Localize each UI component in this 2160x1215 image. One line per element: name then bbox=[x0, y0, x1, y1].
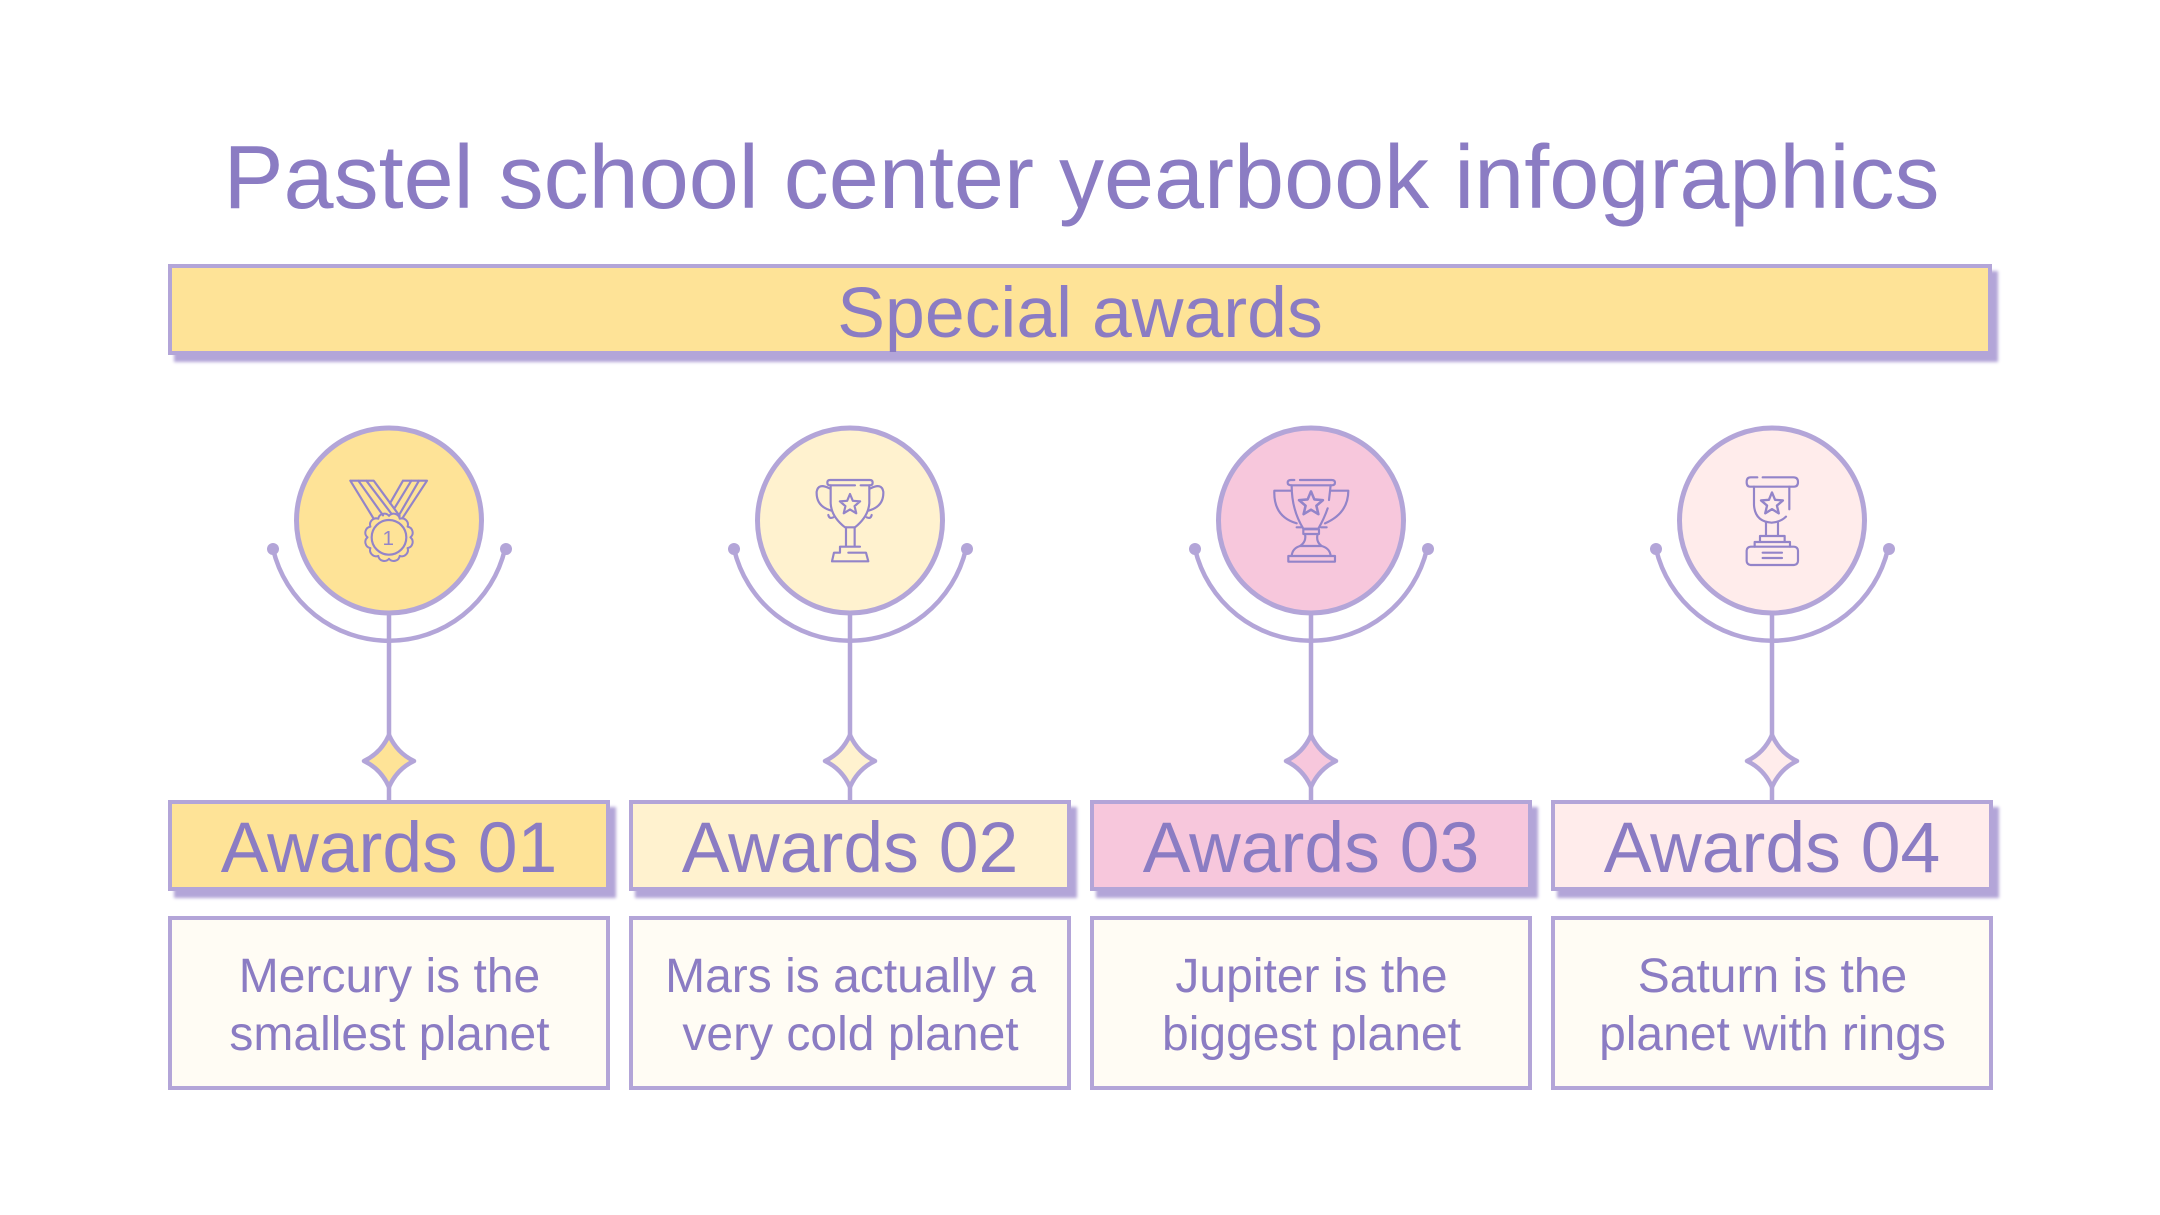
text: mercury bbox=[168, 916, 610, 1090]
panel: awards 03 bbox=[1090, 426, 1540, 1090]
connector and trophy badge bbox=[1189, 426, 1434, 800]
text: mercury: Mercury is the bbox=[239, 950, 540, 1003]
text: saturn: Saturn is the bbox=[1638, 950, 1907, 1003]
label: awards 01 bbox=[168, 800, 610, 891]
text: mars: Mars is actually a bbox=[665, 950, 1036, 1003]
label: awards 01: Awards 01 bbox=[221, 808, 557, 888]
label: awards 04: Awards 04 bbox=[1604, 808, 1940, 888]
icon: medal bbox=[350, 481, 427, 561]
text: jupiter: Jupiter is the bbox=[1175, 950, 1448, 1003]
label: awards 02 bbox=[629, 800, 1071, 891]
icon: trophy on plaque bbox=[1747, 477, 1798, 565]
text: mars: very cold planet bbox=[682, 1008, 1019, 1061]
panel: awards 02 bbox=[629, 426, 1079, 1090]
connector and trophy badge bbox=[728, 426, 973, 800]
text: saturn: planet with rings bbox=[1599, 1008, 1946, 1061]
panel: awards 01 bbox=[168, 426, 618, 1090]
connector and medal badge bbox=[267, 426, 512, 800]
text: jupiter bbox=[1090, 916, 1532, 1090]
text: jupiter: biggest planet bbox=[1162, 1008, 1461, 1061]
icon: medal: 1 bbox=[383, 527, 394, 550]
text: mars bbox=[629, 916, 1071, 1090]
text: saturn bbox=[1551, 916, 1993, 1090]
icon: trophy bbox=[817, 480, 883, 561]
banner: special awards bbox=[168, 264, 1992, 355]
label: awards 02: Awards 02 bbox=[682, 808, 1018, 888]
label: awards 04 bbox=[1551, 800, 1993, 891]
text: mercury: smallest planet bbox=[229, 1008, 550, 1061]
panel: awards 04 bbox=[1551, 426, 2001, 1090]
title: Pastel school center yearbook infographics bbox=[224, 128, 1939, 228]
label: awards 03: Awards 03 bbox=[1143, 808, 1479, 888]
connector and trophy badge bbox=[1650, 426, 1895, 800]
icon: trophy bbox=[1274, 480, 1348, 562]
label: awards 03 bbox=[1090, 800, 1532, 891]
banner: special awards: Special awards bbox=[837, 273, 1323, 353]
